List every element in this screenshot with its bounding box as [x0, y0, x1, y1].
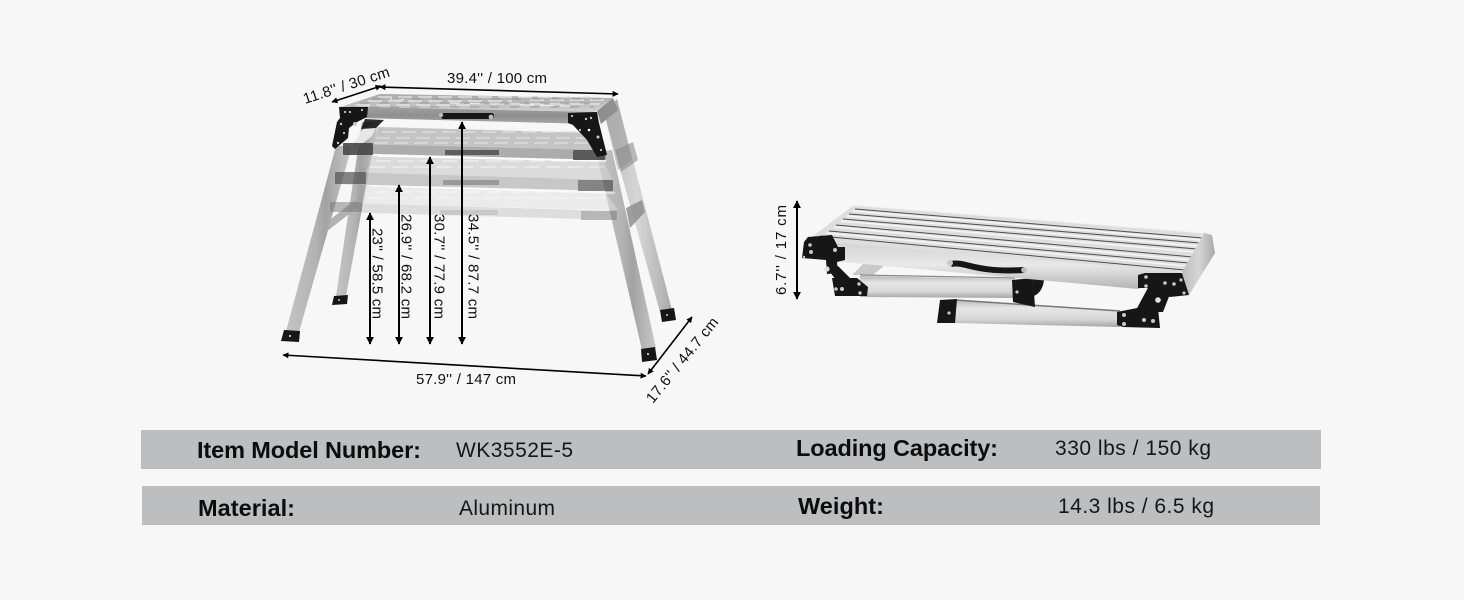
third ghost platform: [335, 156, 615, 193]
label: loading capacity: Loading Capacity:: [796, 435, 998, 461]
row background: [142, 486, 1320, 525]
top platform deck: [340, 94, 613, 129]
value: loading capacity: 330 lbs / 150 kg: [1055, 437, 1211, 460]
row background: [141, 430, 1321, 469]
arrow: height 23 in: [369, 213, 371, 344]
label: 11.8 in: 11.8'' / 30 cm: [301, 64, 392, 108]
label: 17.6 in: 17.6'' / 44.7 cm: [643, 314, 722, 407]
dimension arrows: main platform: [283, 86, 692, 376]
second ghost platform: [343, 127, 606, 161]
left hinge brackets: [802, 235, 868, 296]
specification row 2: [142, 486, 1320, 525]
value: weight: 14.3 lbs / 6.5 kg: [1058, 495, 1214, 518]
label: 23 in: 23'' / 58.5 cm: [368, 228, 386, 319]
folded deck end face: [1182, 233, 1215, 295]
carry handle: [947, 260, 1027, 273]
dimension labels: main platform: [301, 64, 722, 407]
arrow: length 39.4 in: [380, 87, 618, 94]
specification row 1: [141, 430, 1321, 469]
platform carry handle: [439, 113, 494, 119]
right corner bracket: [568, 112, 607, 157]
value: material: Aluminum: [459, 497, 555, 520]
arrow: base width 17.6 in: [648, 317, 692, 374]
centre hinge bracket: [1012, 278, 1044, 307]
label: weight: Weight:: [798, 493, 884, 519]
label: 26.9 in: 26.9'' / 68.2 cm: [398, 214, 414, 319]
label: 30.7 in: 30.7'' / 77.9 cm: [430, 214, 448, 319]
left corner bracket: [332, 107, 368, 149]
illustration: adjustable work platform: [281, 94, 676, 362]
label: 39.4 in: 39.4'' / 100 cm: [447, 70, 547, 87]
value: model number: WK3552E-5: [456, 439, 573, 462]
label: 57.9 in: 57.9'' / 147 cm: [416, 371, 516, 388]
label: material: Material:: [198, 495, 295, 521]
left rear leg: [332, 122, 378, 305]
arrow: height 34.5 in: [461, 122, 463, 344]
fourth ghost platform: [330, 186, 618, 220]
label: folded height 6.7 in: 6.7'' / 17 cm: [773, 205, 790, 295]
left front leg: [281, 122, 378, 342]
arrow: height 26.9 in: [398, 185, 400, 344]
right hinge brackets: [1117, 273, 1189, 328]
arrow: width 11.8 in: [332, 86, 381, 102]
right rear leg: [604, 99, 676, 322]
illustration: folded platform: [802, 205, 1215, 328]
arrow: height 30.7 in: [429, 157, 431, 344]
folded deck top: [805, 205, 1207, 272]
arrow: folded height: [796, 201, 798, 299]
label: item model number: Item Model Number:: [197, 437, 421, 463]
upper folded rail: [852, 264, 1015, 298]
label: 34.5 in: 34.5'' / 87.7 cm: [464, 214, 482, 319]
right front leg: [596, 150, 657, 362]
right end cap: [597, 98, 618, 124]
lower folded rail: [937, 299, 1120, 327]
arrow: base length 57.9 in: [283, 355, 646, 376]
folded deck front face: [815, 241, 1182, 289]
